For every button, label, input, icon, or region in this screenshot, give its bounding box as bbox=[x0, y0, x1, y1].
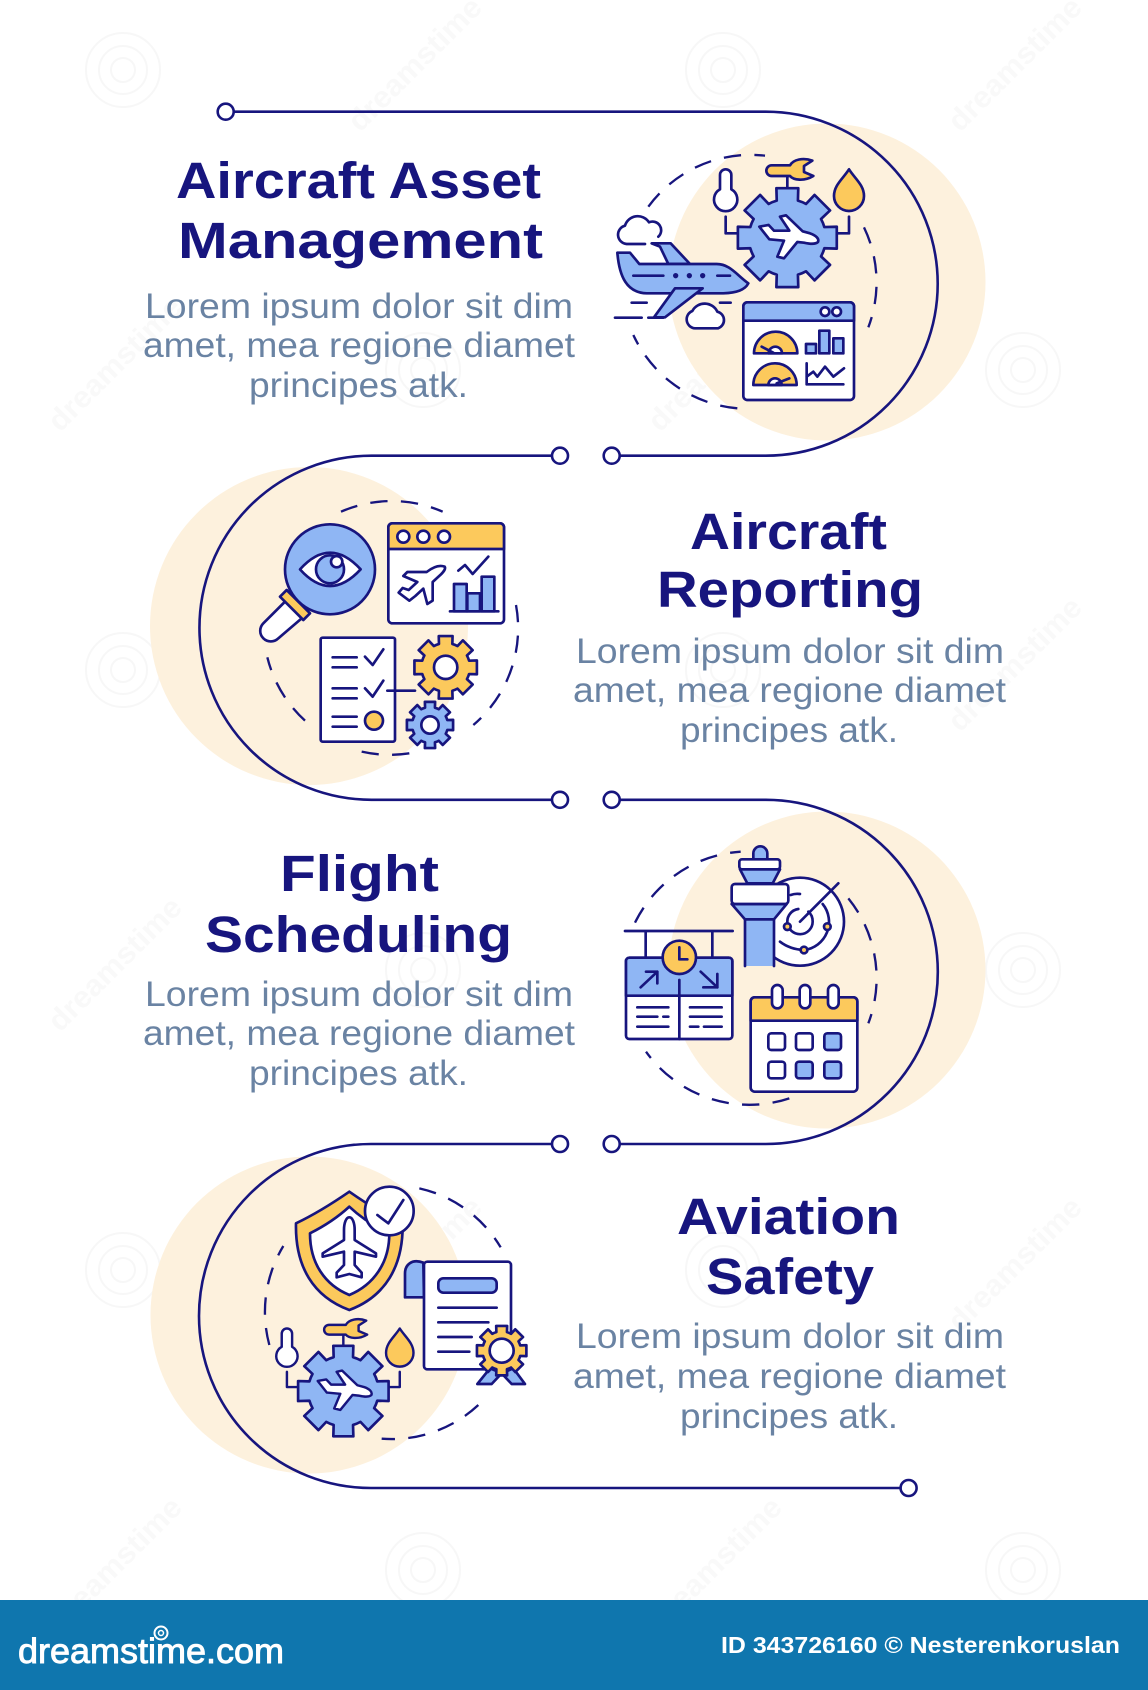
text: dreamstime bbox=[42, 1491, 189, 1638]
panel: aircraft reporting bbox=[150, 448, 1006, 808]
text block 1 bbox=[143, 287, 575, 405]
connector curve 1 bbox=[218, 104, 938, 464]
panel: aircraft asset management bbox=[143, 104, 986, 464]
heading: flight scheduling bbox=[205, 845, 512, 963]
heading: flight scheduling: Flight bbox=[280, 845, 439, 902]
text block 4 bbox=[573, 1317, 1006, 1436]
text block 3: Lorem ipsum dolor sit dim bbox=[145, 975, 573, 1014]
heading: aircraft reporting: Aircraft bbox=[690, 503, 887, 560]
footer logo: dreamstime.com bbox=[18, 1632, 284, 1671]
heading: aircraft asset management bbox=[176, 152, 543, 269]
heading: aviation safety: Aviation bbox=[677, 1188, 900, 1245]
text block 1: principes atk. bbox=[249, 366, 468, 405]
icon: scheduling with control tower, radar, board and calendar bbox=[625, 846, 877, 1105]
connector curve 4 bbox=[199, 1136, 917, 1496]
text block 4: principes atk. bbox=[680, 1397, 898, 1436]
text block 2 bbox=[573, 632, 1006, 750]
heading: aviation safety: Safety bbox=[706, 1248, 875, 1305]
heading: aircraft reporting bbox=[657, 503, 923, 618]
text: dreamstime bbox=[342, 591, 489, 738]
text block 1: amet, mea regione diamet bbox=[143, 326, 575, 365]
background circle 2 bbox=[150, 467, 468, 785]
text: dreamstime bbox=[942, 1191, 1089, 1338]
text block 3 bbox=[143, 975, 575, 1093]
connector curve 2 bbox=[199, 448, 568, 808]
heading: aviation safety bbox=[677, 1188, 900, 1305]
icon: reporting with magnifier, chart window, checklist and gears bbox=[260, 501, 518, 755]
background circle 1 bbox=[668, 124, 986, 440]
text block 1: Lorem ipsum dolor sit dim bbox=[145, 287, 573, 326]
heading: flight scheduling: Scheduling bbox=[205, 906, 512, 963]
text: dreamstime bbox=[642, 1491, 789, 1638]
text: dreamstime bbox=[42, 291, 189, 438]
panel: flight scheduling bbox=[143, 792, 986, 1152]
text block 2: Lorem ipsum dolor sit dim bbox=[576, 632, 1004, 671]
icon: safety with shield, certificate and maintenance gear bbox=[265, 1187, 526, 1439]
background circle 4 bbox=[150, 1156, 468, 1474]
text block 2: principes atk. bbox=[680, 711, 898, 750]
heading: aircraft asset management: Aircraft Asset bbox=[176, 152, 541, 209]
heading: aircraft reporting: Reporting bbox=[657, 561, 923, 618]
text block 4: amet, mea regione diamet bbox=[573, 1357, 1006, 1396]
text block 3: amet, mea regione diamet bbox=[143, 1014, 575, 1053]
text block 4: Lorem ipsum dolor sit dim bbox=[576, 1317, 1004, 1356]
text: dreamstime bbox=[342, 1191, 489, 1338]
footer bar bbox=[0, 1600, 1148, 1690]
text block 2: amet, mea regione diamet bbox=[573, 671, 1006, 710]
footer credit: ID 343726160 © Nesterenkoruslan bbox=[721, 1632, 1120, 1658]
text: dreamstime bbox=[942, 591, 1089, 738]
text block 3: principes atk. bbox=[249, 1054, 468, 1093]
text: dreamstime bbox=[642, 291, 789, 438]
panel: aviation safety bbox=[150, 1136, 1006, 1496]
heading: aircraft asset management: Management bbox=[178, 212, 543, 269]
icon: aircraft maintenance with plane and dashboard bbox=[615, 155, 877, 408]
connector curve 3 bbox=[604, 792, 938, 1152]
background circle 3 bbox=[668, 812, 986, 1128]
text: dreamstime bbox=[42, 891, 189, 1038]
text: dreamstime bbox=[642, 891, 789, 1038]
